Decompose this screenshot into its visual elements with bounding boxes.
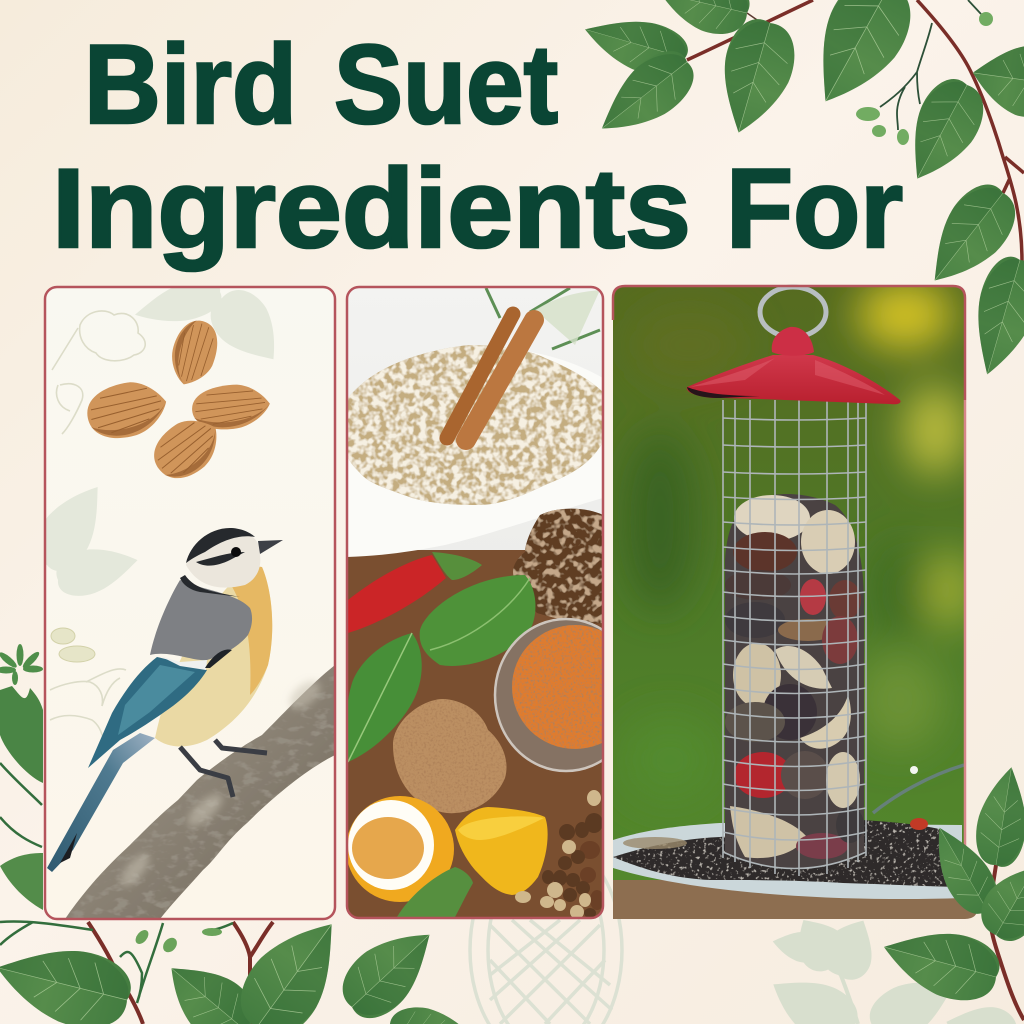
foliage bottom right xyxy=(875,763,1024,1024)
almond top xyxy=(172,320,218,384)
wooden table xyxy=(347,550,603,918)
yellow fruit xyxy=(455,807,548,895)
small frond xyxy=(0,644,43,685)
lower left side leaf xyxy=(0,853,43,910)
panel: bird and almonds xyxy=(25,274,335,919)
white dot xyxy=(910,766,918,774)
head xyxy=(186,536,260,588)
panel border 1 xyxy=(45,287,335,919)
roof knob xyxy=(772,327,814,356)
belly xyxy=(155,567,272,746)
basil leaf xyxy=(420,575,535,666)
wire cage xyxy=(723,400,866,876)
seed pile top xyxy=(513,509,603,623)
red roof xyxy=(687,327,901,404)
wood ledge xyxy=(613,880,978,919)
left side leaf xyxy=(0,686,43,783)
branch xyxy=(989,865,1024,1020)
glass bowl of spice xyxy=(494,618,602,772)
suet chunks xyxy=(725,494,864,868)
chili pepper xyxy=(348,555,446,633)
beak xyxy=(258,540,283,554)
title word: For: For xyxy=(726,146,903,271)
panel border 3 right xyxy=(964,400,966,880)
foliage top right xyxy=(578,0,1024,383)
foliage bottom left xyxy=(0,644,471,1024)
panel border 3 xyxy=(613,286,965,400)
green stems xyxy=(0,763,233,1003)
herb sprigs xyxy=(486,288,600,349)
title word: Ingredients: Ingredients xyxy=(52,146,691,271)
tan seed scatter xyxy=(623,837,687,849)
branches xyxy=(88,922,273,1024)
green leaf bottom xyxy=(397,867,473,917)
faded botanical background xyxy=(25,274,295,742)
tail xyxy=(47,733,155,872)
ground ball xyxy=(393,699,506,813)
legs xyxy=(180,740,267,797)
bud sprig xyxy=(856,0,993,145)
panel: ingredients xyxy=(348,288,602,917)
title word: Suet: Suet xyxy=(334,22,558,147)
side buds xyxy=(133,928,222,955)
seed pile bottom xyxy=(515,790,604,919)
oat cereal xyxy=(348,345,603,505)
cinnamon sticks xyxy=(447,314,534,440)
tree branch xyxy=(65,665,335,919)
red seed xyxy=(910,818,928,830)
branches xyxy=(687,0,1024,262)
panel: bird feeder photo xyxy=(613,281,978,919)
back xyxy=(150,580,252,660)
orange half xyxy=(346,796,454,902)
panel border 2 xyxy=(347,287,603,918)
soil xyxy=(613,820,958,887)
hanging ring xyxy=(760,287,826,337)
seed tray xyxy=(613,818,962,899)
almond bottom xyxy=(154,420,216,478)
wing xyxy=(88,657,207,768)
chili stem leaf xyxy=(432,552,482,580)
perch rail xyxy=(873,765,964,813)
title xyxy=(52,22,903,271)
faded leaves bottom right xyxy=(760,907,965,1024)
almond right xyxy=(192,384,270,430)
almond left xyxy=(87,382,166,438)
basil leaf 2 xyxy=(346,633,422,762)
title word: Bird: Bird xyxy=(84,22,297,147)
white bowl xyxy=(347,348,603,557)
bird xyxy=(47,528,283,872)
faded pinecone xyxy=(470,838,622,1024)
almonds xyxy=(87,320,270,478)
blurred garden background xyxy=(613,281,974,919)
